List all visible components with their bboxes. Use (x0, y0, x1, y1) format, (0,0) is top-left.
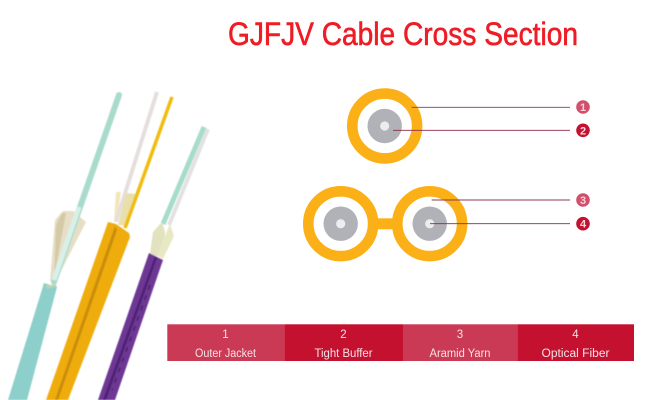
diagram: duplex cable cross section (308, 191, 462, 256)
legend cell: aramid yarn (403, 324, 517, 361)
legend cell: aramid yarn: 3 (457, 329, 463, 341)
purple duplex cable (98, 127, 208, 400)
legend cell: optical fiber: Optical Fiber (542, 348, 610, 360)
legend cell: tight buffer: Tight Buffer (314, 348, 373, 360)
aqua simplex cable (8, 95, 119, 400)
photo: fiber optic cables (8, 92, 208, 400)
callout 3: 3 (580, 195, 586, 207)
diagram: single cable cross section (352, 94, 417, 158)
legend table (167, 324, 634, 361)
legend cell: outer jacket (167, 324, 284, 361)
callout 3 (432, 193, 590, 207)
legend cell: tight buffer (284, 324, 403, 361)
legend cell: outer jacket: 1 (222, 329, 229, 341)
title: GJFJV Cable Cross Section (228, 16, 578, 52)
callout 1: 1 (580, 102, 586, 114)
legend cell: optical fiber: 4 (572, 329, 579, 341)
callout 2 (393, 124, 590, 137)
yellow duplex cable (46, 92, 172, 400)
legend cell: optical fiber (517, 324, 634, 361)
callout 2: 2 (580, 125, 586, 137)
callout 1 (412, 100, 590, 114)
legend cell: tight buffer: 2 (340, 329, 347, 341)
legend cell: outer jacket: Outer Jacket (195, 348, 257, 360)
callout 4: 4 (580, 219, 587, 231)
legend cell: aramid yarn: Aramid Yarn (430, 348, 490, 360)
callout 4 (430, 217, 590, 231)
